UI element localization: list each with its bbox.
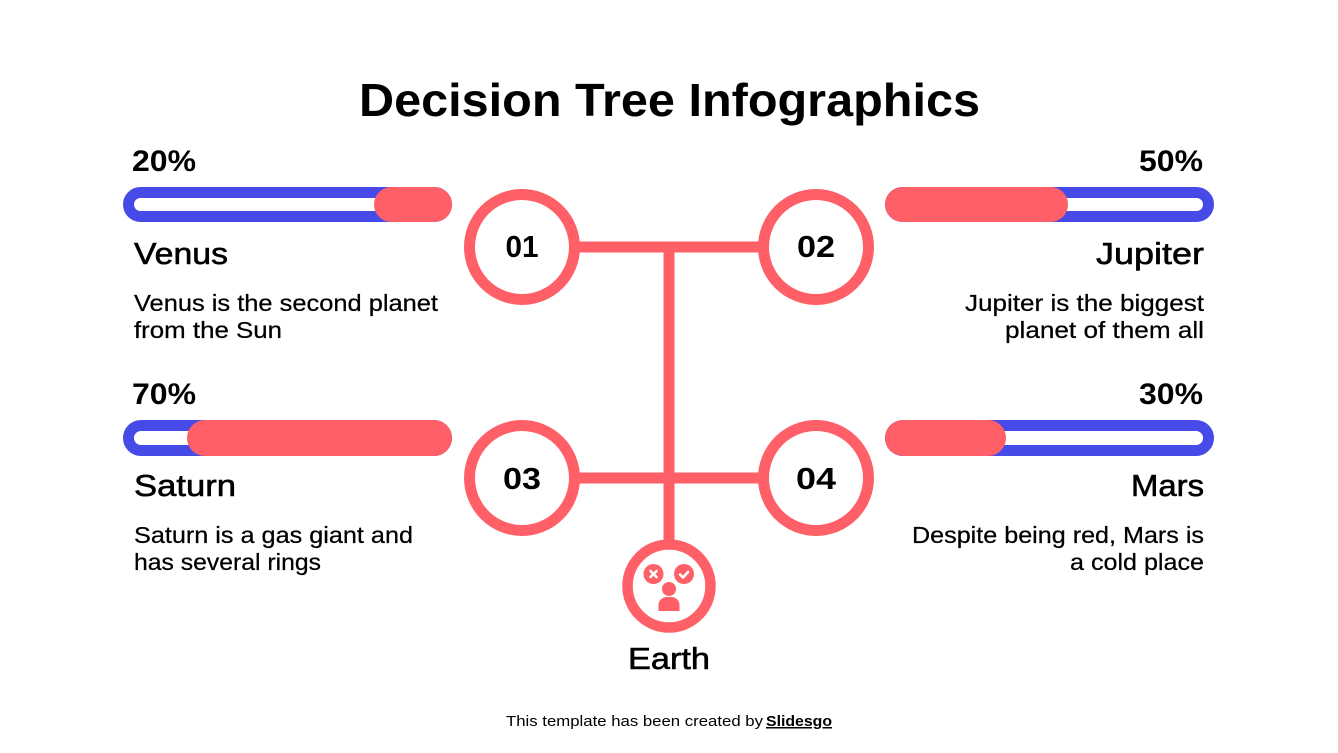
Jupiter description: planet of them all [1005, 317, 1204, 343]
Saturn description: Saturn is a gas giant and [134, 522, 413, 548]
Venus name: Venus [134, 236, 228, 271]
Venus progress bar [128, 187, 452, 222]
Saturn progress bar [128, 420, 452, 456]
Mars description [912, 522, 1204, 575]
panel: Jupiter [885, 145, 1208, 343]
icon: Earth decision node [628, 544, 710, 628]
node 03 [470, 426, 574, 530]
footer credit: This template has been created by [506, 713, 764, 730]
Saturn percentage: 70% [132, 378, 196, 411]
node 01 [470, 194, 574, 300]
Saturn description: has several rings [134, 549, 321, 575]
Mars description: a cold place [1070, 549, 1204, 575]
Venus percentage: 20% [132, 145, 196, 178]
title: Decision Tree Infographics [359, 74, 980, 126]
Mars progress bar [885, 420, 1208, 456]
Mars description: Despite being red, Mars is [912, 522, 1204, 548]
Venus description [134, 290, 439, 343]
tree connector lines [570, 242, 768, 547]
node 04: 04 [796, 461, 837, 496]
Jupiter progress bar [885, 187, 1208, 222]
panel: Saturn [128, 378, 452, 575]
Jupiter description: Jupiter is the biggest [965, 290, 1205, 316]
panel: Venus [128, 145, 452, 343]
Mars percentage: 30% [1139, 378, 1203, 411]
footer credit: Slidesgo [766, 713, 832, 730]
Jupiter name: Jupiter [1096, 236, 1204, 271]
Venus description: Venus is the second planet [134, 290, 439, 316]
Earth label: Earth [628, 641, 710, 676]
Jupiter description [965, 290, 1205, 343]
node 01: 01 [506, 229, 538, 264]
Mars name: Mars [1131, 468, 1204, 503]
node 02: 02 [797, 229, 835, 264]
panel: Mars [885, 378, 1208, 575]
node 04 [764, 426, 868, 530]
Jupiter percentage: 50% [1139, 145, 1203, 178]
Saturn name: Saturn [134, 468, 236, 503]
Venus description: from the Sun [134, 317, 282, 343]
Saturn description [134, 522, 413, 575]
node 03: 03 [503, 461, 541, 496]
node 02 [764, 194, 868, 300]
